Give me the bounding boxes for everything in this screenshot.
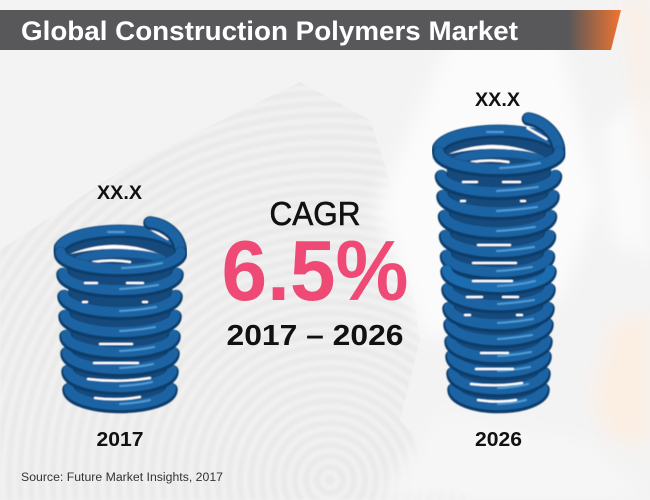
lower coil section [454,390,543,406]
year label 2026: 2026 [475,429,522,451]
CAGR value: 6.5% [222,224,408,319]
CAGR period: 2017 – 2026 [226,320,404,352]
CAGR heading: CAGR [270,195,360,232]
value label 2026: XX.X [475,89,520,111]
title: Global Construction Polymers Market [21,16,518,46]
value label 2017: XX.X [97,182,142,204]
source note: Source: Future Market Insights, 2017 [21,472,223,484]
upper coil section [446,256,548,273]
background: plaster ridges [2,82,417,498]
coil 2026 [438,118,559,408]
year label 2017: 2017 [96,429,144,451]
gaps between 2017 coil turns [83,283,150,399]
background: glove and hand photo [375,0,650,500]
title banner [0,10,621,50]
lower coil top ring [447,272,550,288]
coil 2017 [60,222,181,408]
gaps between 2026 coil turns [461,182,525,402]
